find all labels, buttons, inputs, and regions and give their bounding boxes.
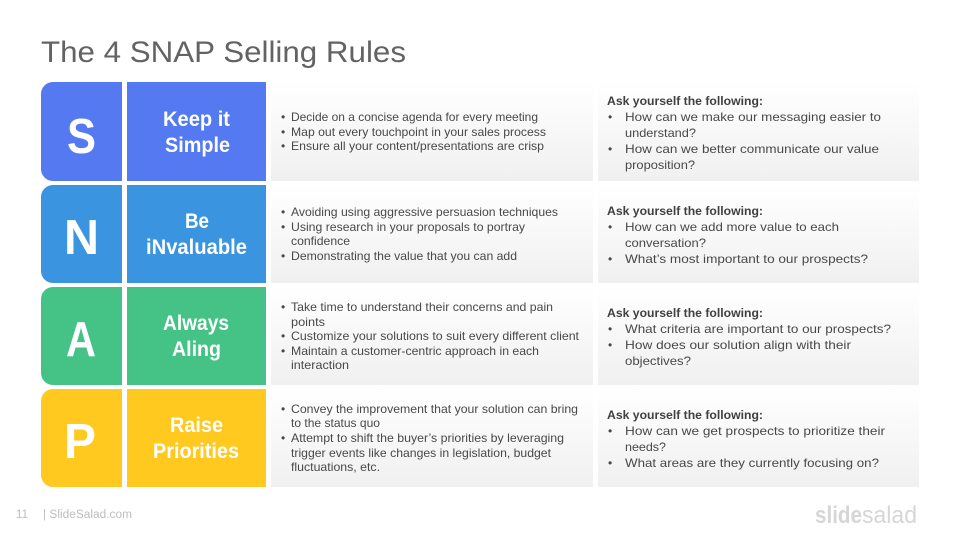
- tips panel P: Convey the improvement that your solution can bring: [291, 402, 578, 416]
- logo: slidesalad wordmark: slide: [815, 502, 862, 529]
- questions panel S: How can we make our messaging easier to: [625, 110, 881, 124]
- tips panel S: Ensure all your content/presentations are crisp: [291, 139, 544, 153]
- questions panel A: Ask yourself the following:: [607, 306, 763, 320]
- questions panel P: How can we get prospects to prioritize their: [625, 424, 885, 438]
- tips panel P: trigger events like changes in legislation, budget: [291, 446, 552, 460]
- tips panel P: to the status quo: [291, 416, 380, 430]
- questions panel S: How can we better communicate our value: [625, 142, 879, 156]
- rule name: Raise Priorities: Priorities: [153, 440, 239, 463]
- questions panel S: proposition?: [625, 158, 695, 172]
- questions panel S: •: [608, 110, 612, 124]
- questions panel A: [598, 287, 919, 385]
- tips panel P: •: [281, 402, 285, 416]
- letter tile A: A: [66, 313, 96, 367]
- questions panel P: What areas are they currently focusing on?: [625, 456, 879, 470]
- questions panel S: understand?: [625, 126, 696, 140]
- tips panel A: •: [281, 329, 285, 343]
- tips panel S: •: [281, 139, 285, 153]
- questions panel S: [598, 82, 919, 181]
- footer: page number: 11: [16, 509, 28, 521]
- tips panel N: [271, 185, 593, 283]
- rule name: Always Aling: [127, 287, 266, 385]
- questions panel A: objectives?: [625, 354, 691, 368]
- footer: source: | SlideSalad.com: [43, 509, 132, 521]
- tips panel P: •: [281, 431, 285, 445]
- tips panel S: Decide on a concise agenda for every meeting: [291, 110, 538, 124]
- rule name: Keep it Simple: [127, 82, 266, 181]
- tips panel P: Attempt to shift the buyer’s priorities by leveraging: [291, 431, 564, 445]
- logo: slidesalad wordmark: salad: [862, 502, 917, 529]
- questions panel N: What’s most important to our prospects?: [625, 252, 868, 266]
- questions panel P: Ask yourself the following:: [607, 408, 763, 422]
- letter tile N: N: [64, 211, 99, 265]
- tips panel S: Map out every touchpoint in your sales process: [291, 125, 546, 139]
- rule name: Raise Priorities: Raise: [170, 414, 223, 437]
- letter tile A: [41, 287, 122, 385]
- questions panel P: needs?: [625, 440, 666, 454]
- panel: row A: [41, 287, 919, 385]
- letter tile S: [41, 82, 122, 181]
- tips panel S: •: [281, 125, 285, 139]
- rule name: Be iNvaluable: iNvaluable: [146, 236, 247, 259]
- questions panel N: •: [608, 220, 612, 234]
- rule name: Always Aling: Always: [163, 312, 229, 335]
- questions panel A: What criteria are important to our prospects?: [625, 322, 891, 336]
- rule name: Keep it Simple: Simple: [165, 134, 230, 157]
- logo: slidesalad wordmark: [815, 502, 917, 529]
- questions panel P: •: [608, 424, 612, 438]
- tips panel N: •: [281, 220, 285, 234]
- tips panel N: •: [281, 249, 285, 263]
- tips panel P: [271, 389, 593, 487]
- tips panel A: Maintain a customer-centric approach in each: [291, 344, 539, 358]
- questions panel P: [598, 389, 919, 487]
- letter tile N: [41, 185, 122, 283]
- questions panel N: Ask yourself the following:: [607, 204, 763, 218]
- questions panel N: •: [608, 252, 612, 266]
- questions panel A: •: [608, 338, 612, 352]
- tips panel A: Customize your solutions to suit every different client: [291, 329, 580, 343]
- letter tile P: [41, 389, 122, 487]
- rule name: Always Aling: Aling: [172, 338, 221, 361]
- tips panel P: fluctuations, etc.: [291, 460, 380, 474]
- tips panel S: •: [281, 110, 285, 124]
- questions panel N: conversation?: [625, 236, 706, 250]
- questions panel S: Ask yourself the following:: [607, 94, 763, 108]
- tips panel N: Using research in your proposals to portray: [291, 220, 525, 234]
- questions panel N: [598, 185, 919, 283]
- tips panel A: Take time to understand their concerns and pain: [291, 300, 553, 314]
- tips panel N: Avoiding using aggressive persuasion techniques: [291, 205, 558, 219]
- tips panel A: [271, 287, 593, 385]
- rule name: Be iNvaluable: Be: [185, 210, 209, 233]
- title: The 4 SNAP Selling Rules: [41, 36, 406, 69]
- rule name: Keep it Simple: Keep it: [163, 108, 230, 131]
- rule name: Raise Priorities: [127, 389, 266, 487]
- panel: row N: [41, 185, 919, 283]
- letter tile S: S: [67, 110, 96, 164]
- tips panel A: points: [291, 315, 325, 329]
- tips panel A: interaction: [291, 358, 349, 372]
- questions panel P: •: [608, 456, 612, 470]
- letter tile P: P: [64, 415, 96, 469]
- rule name: Be iNvaluable: [127, 185, 266, 283]
- questions panel N: How can we add more value to each: [625, 220, 839, 234]
- tips panel N: •: [281, 205, 285, 219]
- panel: row P: [41, 389, 919, 487]
- tips panel A: •: [281, 344, 285, 358]
- tips panel N: Demonstrating the value that you can add: [291, 249, 517, 263]
- questions panel A: How does our solution align with their: [625, 338, 851, 352]
- questions panel S: •: [608, 142, 612, 156]
- panel: row S: [41, 82, 919, 181]
- tips panel S: [271, 82, 593, 181]
- questions panel A: •: [608, 322, 612, 336]
- tips panel A: •: [281, 300, 285, 314]
- tips panel N: confidence: [291, 234, 350, 248]
